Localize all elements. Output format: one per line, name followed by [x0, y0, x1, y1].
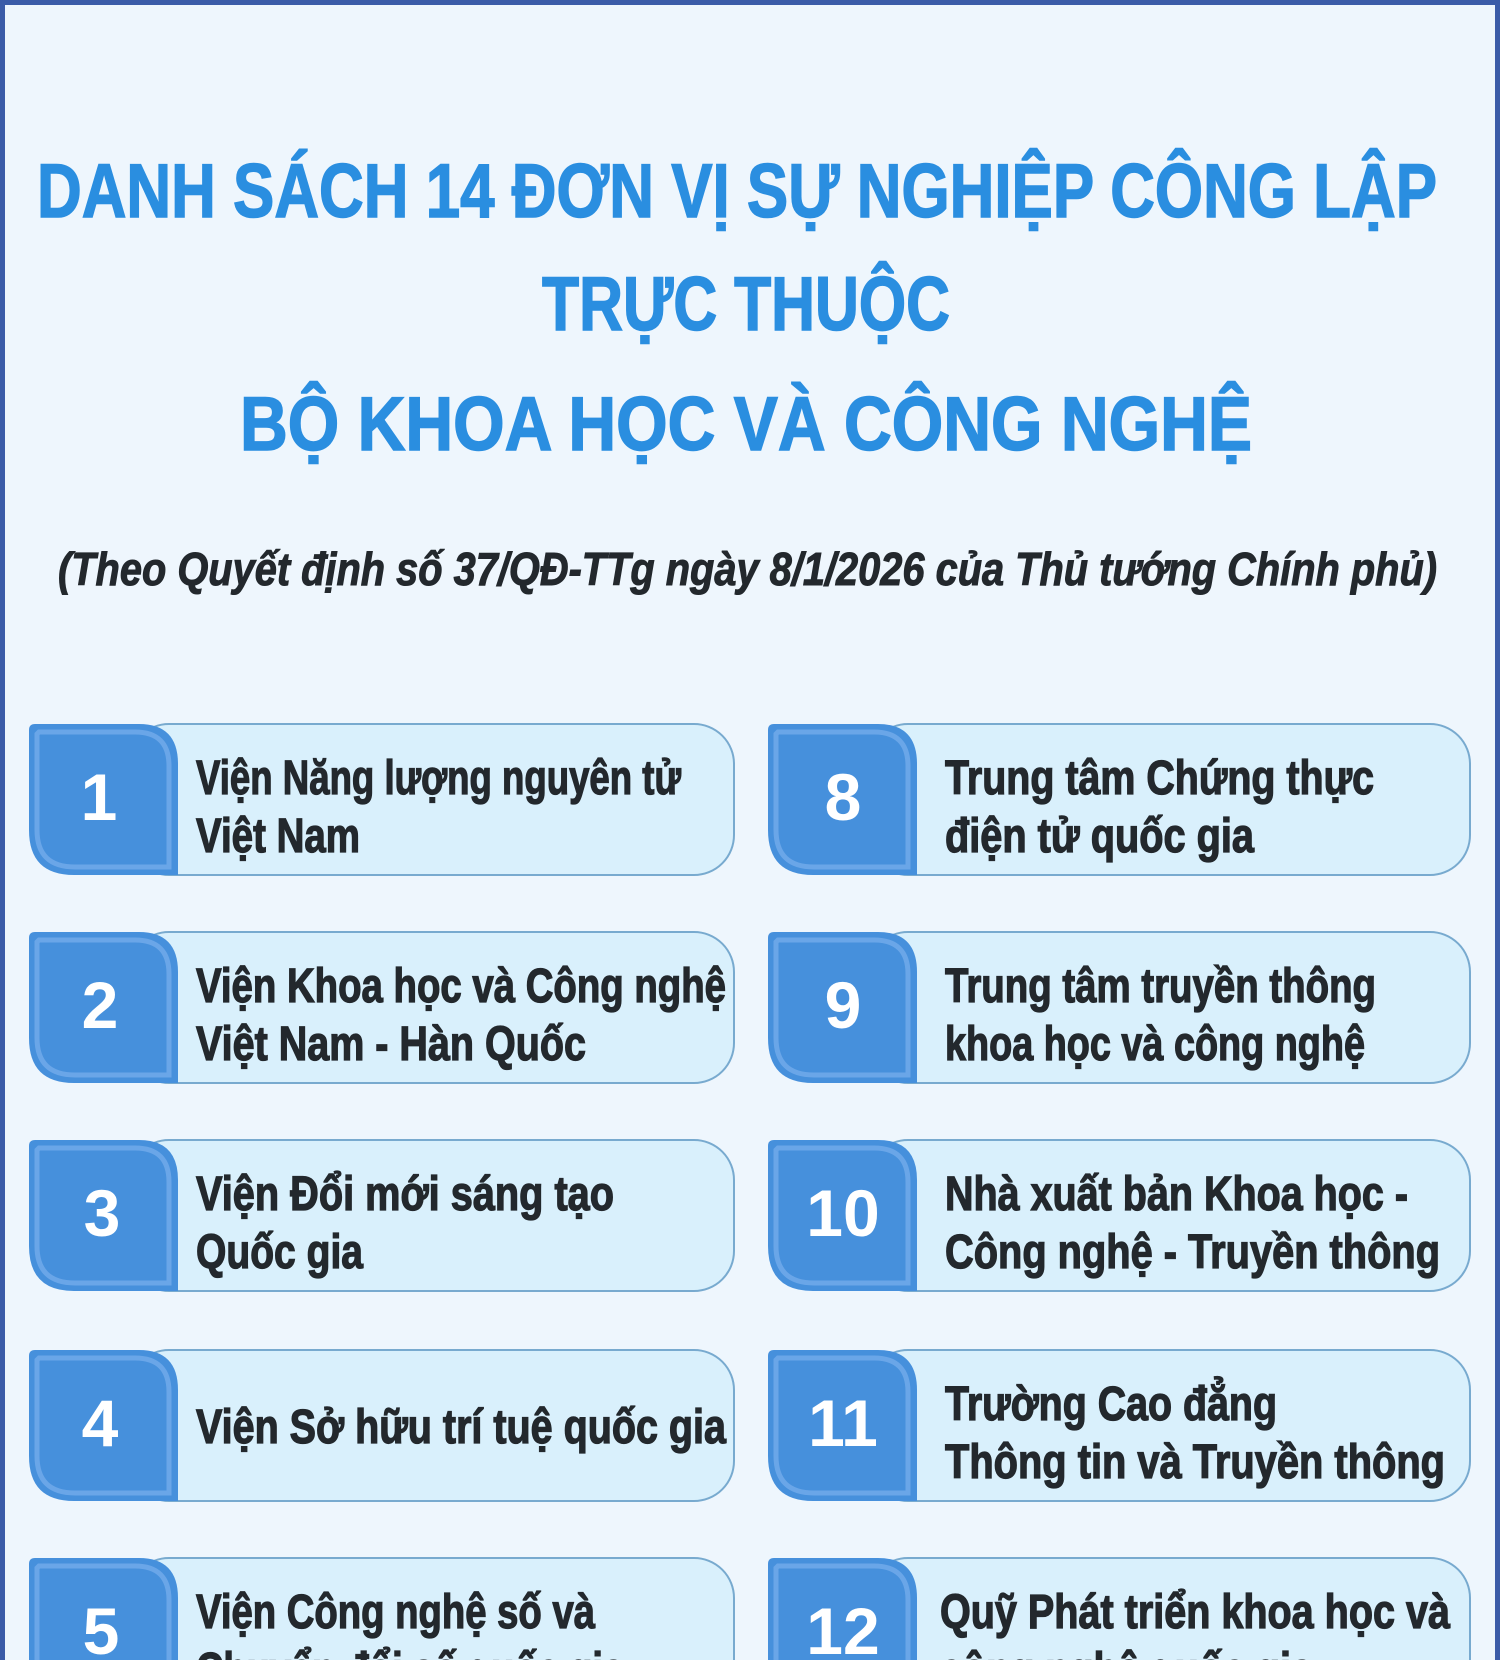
card 2: Viện Khoa học và Công nghệ — [196, 960, 726, 1013]
card 10: 10 — [806, 1176, 880, 1250]
card 9: khoa học và công nghệ — [945, 1018, 1365, 1071]
card 3: 3 — [84, 1176, 120, 1250]
title: TRỰC THUỘC — [542, 262, 950, 347]
card 12 — [768, 1558, 1470, 1660]
card 9 — [768, 932, 1470, 1083]
title: BỘ KHOA HỌC VÀ CÔNG NGHỆ — [240, 381, 1252, 467]
card 5 — [29, 1558, 734, 1660]
card 1: 1 — [81, 760, 117, 834]
card 4 — [29, 1350, 734, 1501]
card 2 — [29, 932, 734, 1083]
card 3: Viện Đổi mới sáng tạo — [196, 1168, 614, 1221]
card 8: 8 — [825, 760, 861, 834]
card 5: Viện Công nghệ số và — [196, 1586, 595, 1639]
card 4: Viện Sở hữu trí tuệ quốc gia — [196, 1401, 726, 1454]
card 10: Nhà xuất bản Khoa học - — [945, 1168, 1408, 1221]
card 10 — [768, 1140, 1470, 1291]
card 9: 9 — [825, 968, 861, 1042]
card 1: Việt Nam — [196, 810, 360, 863]
card 8 — [768, 724, 1470, 875]
card 2: 2 — [82, 968, 118, 1042]
title — [37, 148, 1437, 467]
card 8: điện tử quốc gia — [945, 810, 1254, 863]
card 4: 4 — [82, 1386, 119, 1460]
card 8: Trung tâm Chứng thực — [945, 752, 1374, 805]
card 11 — [768, 1350, 1470, 1501]
card 11: 11 — [808, 1386, 878, 1460]
card 1: Viện Năng lượng nguyên tử — [196, 752, 681, 805]
card 1 — [29, 724, 734, 875]
card 3 — [29, 1140, 734, 1291]
card 3: Quốc gia — [196, 1226, 363, 1279]
card 9: Trung tâm truyền thông — [945, 960, 1376, 1013]
card 2: Việt Nam - Hàn Quốc — [196, 1018, 586, 1071]
card 11: Trường Cao đẳng — [945, 1376, 1277, 1431]
